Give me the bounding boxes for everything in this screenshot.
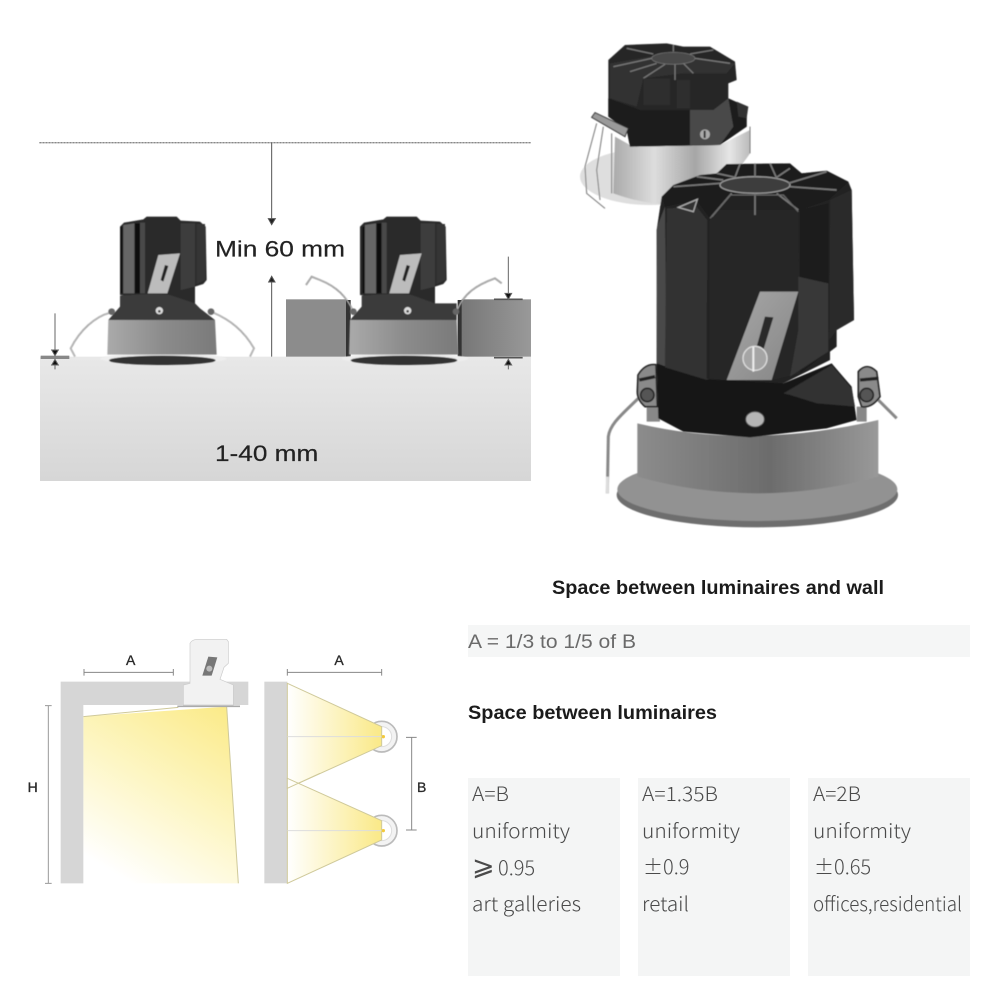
ceiling blocks: thick ceiling bbox=[286, 299, 531, 357]
arrow: height down bbox=[268, 143, 275, 225]
side view: beam edges bbox=[83, 707, 238, 883]
plan view: upper luminaire bbox=[287, 683, 397, 788]
plan view: lower luminaire bbox=[287, 778, 397, 883]
dimension A, side view bbox=[84, 652, 173, 676]
card: offices and residential: offices,residential bbox=[813, 888, 962, 917]
luminaire: left, thin ceiling bbox=[71, 217, 254, 365]
front adjustment plate bbox=[727, 292, 798, 380]
dimension B bbox=[406, 737, 426, 830]
card: retail: A=1.35B bbox=[642, 778, 718, 807]
label: minimum height: Min 60 mm bbox=[215, 237, 345, 262]
card: offices and residential bbox=[808, 778, 970, 976]
dimension H: H bbox=[28, 779, 38, 795]
heading: space to wall: Space between luminaires and wall bbox=[552, 578, 884, 599]
card: art galleries bbox=[468, 778, 620, 976]
card: offices and residential: uniformity bbox=[813, 815, 911, 844]
luminaire: front view bbox=[607, 163, 898, 527]
plan view: wall bbox=[264, 682, 287, 883]
ceiling void reference line bbox=[39, 141, 531, 145]
plan view: crossing beam edge bbox=[287, 773, 320, 788]
dimension A, plan view: A bbox=[334, 652, 344, 668]
side view: wall and ceiling bbox=[61, 682, 248, 883]
panel: ceiling installation diagram bbox=[39, 143, 531, 481]
side view: beam bbox=[83, 707, 238, 883]
label: ceiling thickness: 1-40 mm bbox=[215, 441, 318, 466]
front collar screw bbox=[746, 412, 764, 427]
luminaire: right, thick ceiling bbox=[306, 217, 502, 365]
dimension A, plan view bbox=[287, 652, 382, 676]
card: art galleries: 0.95 bbox=[498, 852, 535, 881]
card: retail: 0.9 bbox=[663, 851, 689, 880]
card: offices and residential: A=2B bbox=[813, 778, 861, 807]
panel: product photograph bbox=[580, 43, 898, 527]
arrow: height up bbox=[269, 276, 275, 357]
card: art galleries: art galleries bbox=[472, 888, 581, 917]
card: art galleries: ⩾ bbox=[472, 844, 495, 883]
ceiling slab bbox=[40, 357, 531, 481]
dimension A, side view: A bbox=[126, 652, 136, 668]
card: offices and residential: 0.65 bbox=[834, 851, 871, 880]
heading: space between luminaires: Space between luminaires bbox=[468, 703, 717, 724]
card: retail: ± bbox=[643, 851, 663, 880]
panel: lighting geometry diagrams bbox=[28, 639, 426, 883]
formula band: A = 1/3 to 1/5 of B bbox=[468, 632, 636, 653]
side view: luminaire icon bbox=[177, 639, 240, 706]
card: retail: uniformity bbox=[642, 815, 740, 844]
card: retail: retail bbox=[642, 888, 689, 917]
card: art galleries: uniformity bbox=[472, 815, 570, 844]
thick ceiling thickness marker bbox=[494, 257, 523, 369]
dimension H bbox=[28, 706, 52, 883]
front collar bbox=[657, 363, 857, 437]
card: retail bbox=[638, 778, 790, 976]
front heat sink bbox=[657, 163, 855, 407]
front spring clips bbox=[607, 365, 897, 493]
card: offices and residential: ± bbox=[814, 851, 834, 880]
dimension B: B bbox=[417, 779, 426, 795]
formula band bbox=[468, 625, 970, 657]
luminaire: rear view bbox=[580, 43, 750, 208]
card: art galleries: A=B bbox=[472, 778, 509, 807]
front flange and ring bbox=[617, 407, 898, 527]
thin ceiling thickness marker bbox=[41, 313, 69, 369]
